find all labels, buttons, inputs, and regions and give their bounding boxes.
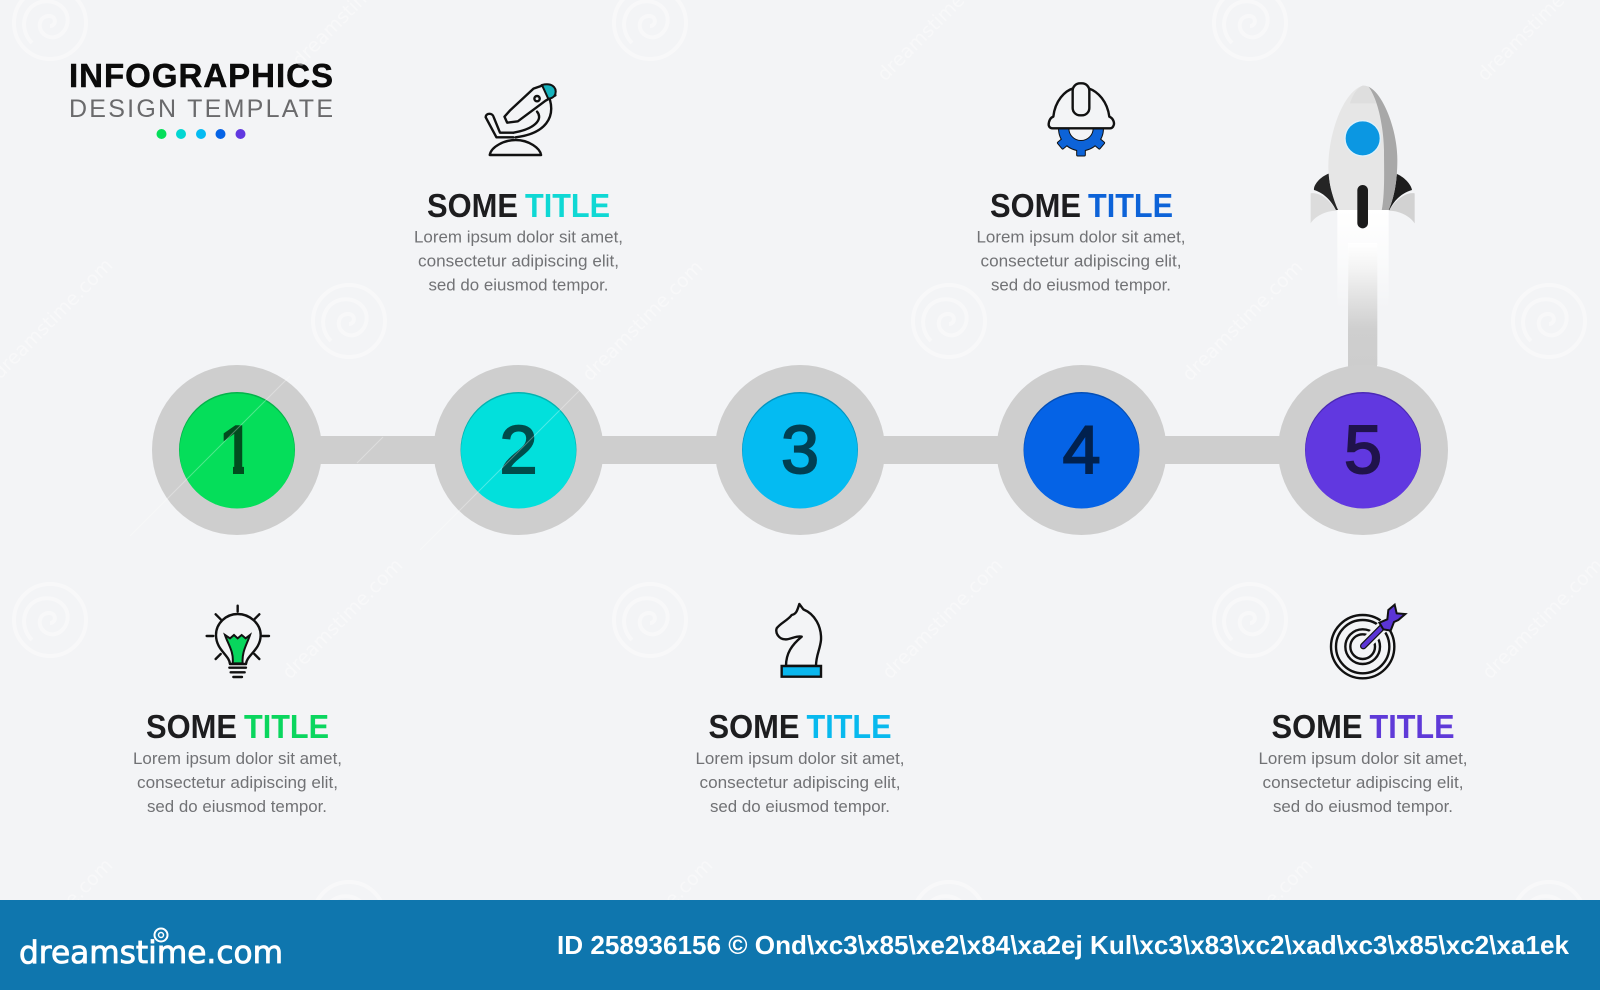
title: step 5 (1272, 708, 1454, 745)
watermark diagonal text: dreamstime.com (878, 554, 1007, 684)
title: step 5: TITLE (1370, 708, 1454, 745)
text: step 4: sed do eiusmod tempor. (991, 276, 1171, 294)
text: step 4 (976, 228, 1186, 294)
title: step 3: TITLE (806, 708, 892, 745)
icon: microscope (486, 84, 556, 155)
text: step 2 (414, 228, 623, 294)
title: step 1: SOME (146, 708, 237, 745)
title: step 2: TITLE (525, 187, 610, 224)
rocket (1311, 86, 1415, 365)
heading (69, 57, 333, 139)
number 3: 3 (781, 412, 819, 488)
text: step 1: consectetur adipiscing elit, (137, 774, 338, 792)
icon: chess knight (776, 604, 821, 677)
footer logo: dreamstime.com (19, 935, 283, 971)
title: step 2 (427, 187, 610, 224)
text: step 2: consectetur adipiscing elit, (418, 252, 619, 270)
title: step 1 (146, 708, 329, 745)
step 1 node (152, 365, 322, 535)
heading title: INFOGRAPHICS (69, 57, 333, 94)
text: step 5 (1258, 750, 1468, 816)
text: step 5: consectetur adipiscing elit, (1262, 774, 1464, 792)
rocket trail (1348, 243, 1377, 368)
number 5: 5 (1344, 412, 1382, 488)
icon: hard hat with gear (1049, 83, 1114, 156)
text: step 5: sed do eiusmod tempor. (1273, 798, 1453, 816)
footer credit: ID 258936156 © Ond\xc3\x85\xe2\x84\xa2ej Kul\xc3\x83\xc2\xad\xc3\x85\xc2\xa1ek (557, 930, 1570, 960)
text: step 3: Lorem ipsum dolor sit amet, (696, 750, 904, 768)
number 1: 1 (218, 412, 256, 488)
title: step 4: SOME (990, 187, 1081, 224)
step 2 node (434, 365, 604, 535)
text: step 4: Lorem ipsum dolor sit amet, (976, 228, 1186, 246)
step 3 node (715, 365, 885, 535)
icon: light bulb (207, 606, 269, 677)
title: step 3 (708, 708, 892, 745)
icon: target with arrow (1331, 605, 1405, 678)
title: step 4: TITLE (1088, 187, 1173, 224)
text: step 2: sed do eiusmod tempor. (428, 276, 608, 294)
text: step 3: consectetur adipiscing elit, (700, 774, 900, 792)
footer bar (0, 900, 1600, 990)
text: step 1: Lorem ipsum dolor sit amet, (133, 750, 342, 768)
text: step 1 (133, 750, 342, 816)
number 2: 2 (500, 412, 537, 488)
step 5 node (1278, 365, 1448, 535)
watermark diagonal text: dreamstime.com (1188, 854, 1317, 984)
timeline connector (237, 436, 1363, 464)
step 4 node (996, 365, 1166, 535)
watermark diagonal text: dreamstime.com (578, 256, 707, 386)
title: step 3: SOME (708, 708, 800, 745)
title: step 4 (990, 187, 1173, 224)
watermark diagonal text: dreamstime.com (1178, 256, 1307, 386)
number 4: 4 (1063, 412, 1100, 488)
text: step 2: Lorem ipsum dolor sit amet, (414, 228, 623, 246)
text: step 5: Lorem ipsum dolor sit amet, (1258, 750, 1468, 768)
watermark diagonal text: dreamstime.com (588, 854, 717, 984)
heading dots (156, 129, 246, 139)
title: step 1: TITLE (244, 708, 329, 745)
text: step 4: consectetur adipiscing elit, (980, 252, 1182, 270)
title: step 2: SOME (427, 187, 518, 224)
title: step 5: SOME (1272, 708, 1362, 745)
text: step 3 (696, 750, 904, 816)
text: step 1: sed do eiusmod tempor. (147, 798, 327, 816)
watermark diagonal text: dreamstime.com (278, 554, 407, 684)
heading subtitle: DESIGN TEMPLATE (69, 95, 333, 123)
text: step 3: sed do eiusmod tempor. (710, 798, 890, 816)
